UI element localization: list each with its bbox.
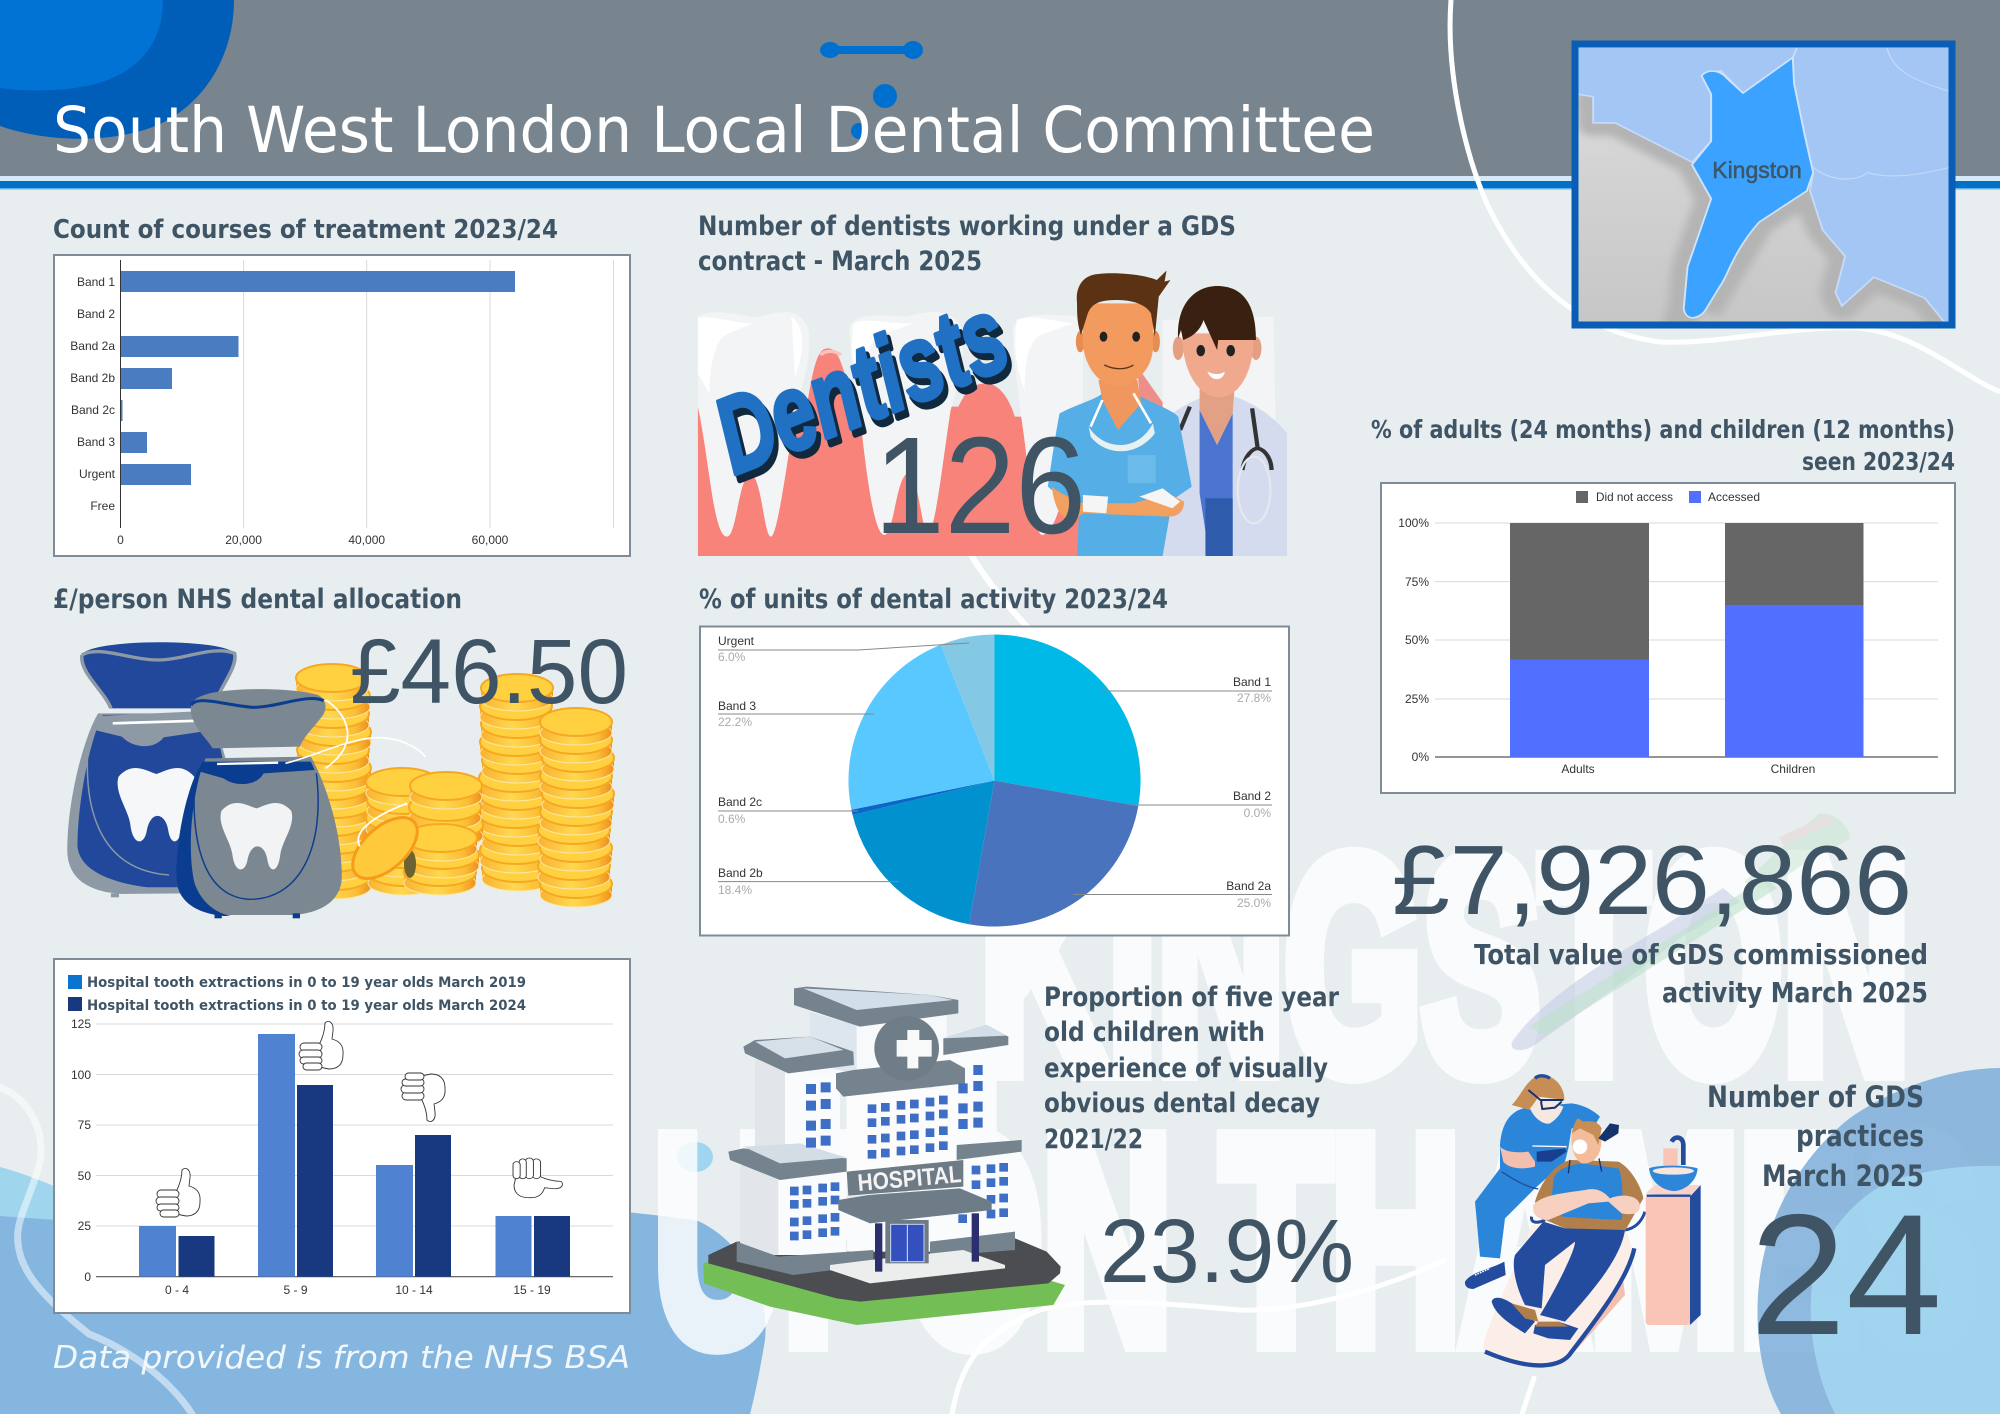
pie chart: units of dental activity: Band 2b bbox=[718, 866, 763, 880]
bar chart: hospital tooth extractions: 5 - 9 bbox=[283, 1283, 308, 1297]
category labels: Band 2b bbox=[70, 371, 115, 385]
illustration: coin stacks bbox=[296, 664, 614, 907]
category labels: Band 2a bbox=[70, 339, 115, 353]
text: number of GDS practices bbox=[1707, 1080, 1924, 1193]
pie chart: units of dental activity: 0.6% bbox=[718, 812, 746, 826]
pie chart: units of dental activity: 18.4% bbox=[718, 883, 752, 897]
base bbox=[703, 1262, 1065, 1325]
heading: number of dentists: Number of dentists working under a GDS bbox=[698, 211, 1236, 242]
leader lines bbox=[718, 643, 1272, 894]
floss box: blue bbox=[67, 642, 235, 897]
bars: accessed bbox=[1510, 605, 1864, 757]
illustration: hospital building: HOSPITAL bbox=[857, 1161, 962, 1197]
woman dentist bbox=[1161, 286, 1287, 556]
gums bbox=[698, 348, 1170, 556]
category labels: Band 2c bbox=[71, 403, 115, 417]
bar chart: courses of treatment bbox=[54, 255, 630, 556]
pie chart: units of dental activity: 27.8% bbox=[1237, 691, 1271, 705]
pie chart: units of dental activity: Band 2c bbox=[718, 795, 762, 809]
text: proportion of five year olds: 2021/22 bbox=[1044, 1124, 1143, 1155]
top-left blue blob bbox=[0, 0, 234, 139]
axis labels: 125 bbox=[71, 1017, 91, 1031]
patient figure bbox=[1492, 1118, 1643, 1340]
heading: courses of treatment: Count of courses of treatment 2023/24 bbox=[53, 215, 558, 245]
category labels: Band 2 bbox=[77, 307, 115, 321]
Dentists lettering bbox=[698, 273, 1027, 502]
axis labels bbox=[71, 1017, 91, 1284]
text: proportion of five year olds: experience of visually bbox=[1044, 1053, 1328, 1084]
category labels bbox=[70, 275, 116, 513]
locator map: Kingston bbox=[1575, 44, 1954, 335]
stacked bar chart: adults and children seen: Children bbox=[1771, 762, 1815, 776]
axis labels: 100% bbox=[1398, 516, 1429, 530]
legend: Hospital tooth extractions in 0 to 19 year olds March 2019 bbox=[87, 975, 526, 991]
category labels: Band 3 bbox=[77, 435, 115, 449]
title: South West London Local Dental Committee bbox=[53, 94, 1375, 167]
entrance bbox=[830, 1250, 1005, 1283]
slice labels: Band 2a bbox=[1226, 879, 1271, 893]
pie chart: units of dental activity: 25.0% bbox=[1237, 896, 1271, 910]
heading: number of dentists: contract - March 2025 bbox=[698, 246, 982, 277]
slices bbox=[848, 634, 1141, 927]
illustration: dentist treating patient bbox=[1465, 1075, 1701, 1367]
bar chart: hospital tooth extractions: 10 - 14 bbox=[395, 1283, 433, 1297]
white curve lines bbox=[0, 535, 1534, 1414]
legend: Hospital tooth extractions in 0 to 19 year olds March 2024 bbox=[87, 998, 526, 1014]
bars 2024 bbox=[178, 1085, 570, 1277]
text: proportion of five year olds: Proportion of five year bbox=[1044, 982, 1340, 1013]
slice labels: Band 2 bbox=[1233, 789, 1271, 803]
text: total value of GDS activity bbox=[1474, 939, 1928, 1009]
decorative blue dumbbell and dots bbox=[820, 41, 923, 139]
category labels: Urgent bbox=[79, 467, 116, 481]
footer note: Data provided is from the NHS BSA bbox=[53, 1340, 630, 1376]
header band bbox=[0, 0, 2000, 176]
axis labels: 75% bbox=[1405, 575, 1429, 589]
Dentists lettering: Dentists bbox=[702, 279, 1027, 502]
legend: Did not access bbox=[1596, 490, 1673, 504]
bar chart: hospital tooth extractions: 0 - 4 bbox=[165, 1283, 189, 1297]
text: number of GDS practices: Number of GDS bbox=[1707, 1080, 1924, 1114]
legend: Accessed bbox=[1708, 490, 1760, 504]
dental chair bbox=[1483, 1212, 1645, 1367]
dentist figure bbox=[1465, 1075, 1600, 1289]
left bottom blue blob bbox=[0, 1142, 766, 1414]
locator map: Kingston: Kingston bbox=[1712, 157, 1802, 183]
category labels: Free bbox=[90, 499, 115, 513]
axis labels: 25% bbox=[1405, 692, 1429, 706]
value: 24: 24 bbox=[1750, 1179, 1942, 1371]
pie chart: units of dental activity: 6.0% bbox=[718, 650, 746, 664]
icon: thumbs up small bbox=[156, 1168, 200, 1217]
text: total value of GDS activity: activity March 2025 bbox=[1662, 977, 1928, 1009]
pie chart: units of dental activity bbox=[700, 626, 1289, 936]
Dentists lettering: Dentists bbox=[698, 273, 1023, 496]
bars: did not access bbox=[1510, 523, 1864, 660]
axis labels: 25 bbox=[78, 1219, 91, 1233]
legend bbox=[68, 975, 526, 1014]
heading: number of dentists bbox=[698, 211, 1236, 277]
axis labels: 0% bbox=[1412, 750, 1429, 764]
floss box: grey bbox=[176, 689, 342, 918]
axis labels: 50 bbox=[78, 1169, 91, 1183]
value: 23.9%: 23.9% bbox=[1100, 1202, 1354, 1302]
pie chart: units of dental activity: Urgent bbox=[718, 634, 755, 648]
illustration: hospital building bbox=[703, 987, 1065, 1325]
cross emblem bbox=[874, 1016, 939, 1081]
text: total value of GDS activity: Total value of GDS commissioned bbox=[1474, 939, 1928, 971]
windows bbox=[790, 1065, 1008, 1240]
man dentist bbox=[1048, 271, 1192, 556]
right bottom blue blobs bbox=[1757, 1068, 2000, 1414]
bar chart: hospital tooth extractions: 15 - 19 bbox=[513, 1283, 551, 1297]
text: proportion of five year olds bbox=[1044, 982, 1340, 1155]
axis labels: 0 bbox=[117, 533, 124, 547]
value: 46.50 pounds: £46.50 bbox=[350, 621, 628, 723]
axis labels: 0 bbox=[84, 1270, 91, 1284]
heading: adults and children seen bbox=[1371, 415, 1955, 476]
illustration: floss boxes with teeth bbox=[67, 642, 425, 918]
value: 126: 126 bbox=[874, 409, 1086, 563]
icon: thumbs down bbox=[401, 1073, 445, 1122]
illustration: faint toothbrush bbox=[1511, 814, 1850, 1050]
bar chart: hospital tooth extractions bbox=[54, 959, 630, 1313]
axis labels bbox=[1398, 516, 1429, 764]
heading: allocation per person: £/person NHS dental allocation bbox=[53, 584, 462, 615]
icon: pointing hand bbox=[513, 1158, 563, 1198]
text: number of GDS practices: practices bbox=[1796, 1119, 1924, 1153]
text: number of GDS practices: March 2025 bbox=[1762, 1159, 1924, 1193]
legend bbox=[1576, 490, 1760, 504]
heading: units of dental activity: % of units of dental activity 2023/24 bbox=[699, 584, 1168, 615]
bars bbox=[121, 271, 515, 485]
axis labels: 50% bbox=[1405, 633, 1429, 647]
heading: adults and children seen: seen 2023/24 bbox=[1802, 447, 1955, 476]
icon: thumbs up bbox=[299, 1021, 343, 1070]
axis labels: 40,000 bbox=[348, 533, 385, 547]
pie chart: units of dental activity: 0.0% bbox=[1244, 806, 1271, 820]
axis labels: 60,000 bbox=[472, 533, 509, 547]
teeth bbox=[698, 312, 1275, 537]
floss thread bbox=[285, 700, 425, 847]
category labels: Band 1 bbox=[77, 275, 115, 289]
stacked bar chart: adults and children seen: Adults bbox=[1561, 762, 1595, 776]
text: proportion of five year olds: old children with bbox=[1044, 1017, 1265, 1048]
pie chart: units of dental activity: 22.2% bbox=[718, 715, 752, 729]
header rule bbox=[0, 176, 2000, 190]
stacked bar chart: adults and children seen bbox=[1381, 483, 1955, 793]
pie chart: units of dental activity: Band 3 bbox=[718, 699, 756, 713]
cabinet and basin bbox=[1646, 1138, 1701, 1325]
illustration: teeth and dentists with 126 bbox=[698, 271, 1287, 563]
roofs bbox=[728, 987, 1022, 1180]
slice labels: Band 1 bbox=[1233, 675, 1271, 689]
bars 2019 bbox=[139, 1034, 532, 1277]
wings bbox=[740, 1012, 1015, 1255]
axis labels: 75 bbox=[78, 1118, 91, 1132]
text: proportion of five year olds: obvious dental decay bbox=[1044, 1088, 1320, 1119]
value: total commissioned: £7,926,866 bbox=[1392, 825, 1912, 935]
slice labels bbox=[1226, 675, 1271, 893]
axis labels: 20,000 bbox=[225, 533, 262, 547]
axis labels: 100 bbox=[71, 1068, 91, 1082]
hospital sign bbox=[847, 1160, 963, 1196]
watermark text: Kingston upon Thames bbox=[654, 796, 1978, 1403]
white header curve bbox=[1450, 0, 2000, 392]
axis labels bbox=[117, 533, 509, 547]
